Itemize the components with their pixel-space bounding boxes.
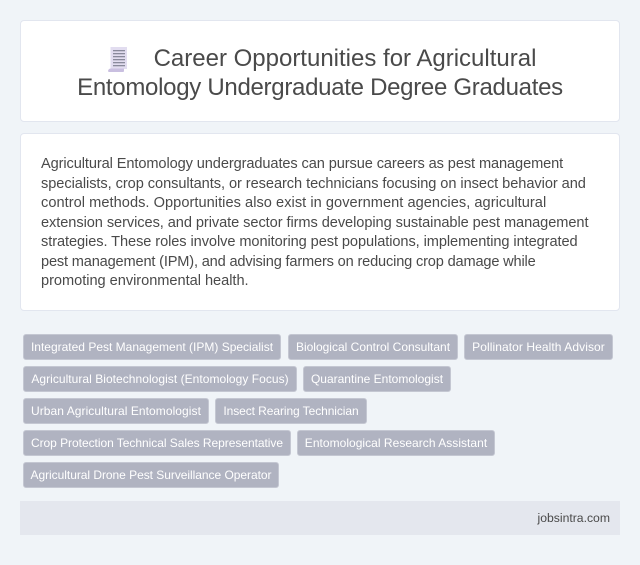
summary text: control methods. Opportunities also exist in government agencies, agricultural: [41, 195, 546, 211]
tag: [215, 398, 367, 424]
career tags: [23, 334, 613, 488]
tag: [297, 430, 495, 456]
summary text: extension services, and private sector firms developing sustainable pest management: [41, 214, 588, 230]
header panel: [20, 20, 620, 122]
tag: Agricultural Biotechnologist (Entomology Focus): [31, 372, 289, 386]
tag: Integrated Pest Management (IPM) Specialist: [31, 340, 273, 354]
tag: Urban Agricultural Entomologist: [31, 404, 201, 418]
tag: [23, 366, 297, 392]
tag: Crop Protection Technical Sales Representative: [31, 436, 283, 450]
tag: [23, 462, 279, 488]
summary text: pest management (IPM), and advising farmers on reducing crop damage while: [41, 254, 536, 270]
footer bar: [20, 501, 620, 535]
title: [77, 45, 563, 101]
summary panel: [20, 133, 620, 311]
summary text: Agricultural Entomology undergraduates can pursue careers as pest management: [41, 156, 563, 172]
tag: Quarantine Entomologist: [311, 372, 443, 386]
tag: Entomological Research Assistant: [305, 436, 487, 450]
tag: [23, 334, 281, 360]
title: Entomology Undergraduate Degree Graduates: [77, 74, 563, 101]
tag: Agricultural Drone Pest Surveillance Operator: [30, 468, 271, 482]
icon: document scroll: [108, 47, 127, 72]
summary text: [41, 156, 588, 289]
tag: [23, 398, 209, 424]
tag: Pollinator Health Advisor: [472, 340, 605, 354]
tag: Biological Control Consultant: [296, 340, 450, 354]
summary text: promoting environmental health.: [41, 273, 249, 289]
tag: [303, 366, 451, 392]
summary text: specialists, crop consultants, or research technicians focusing on insect behavior and: [41, 176, 586, 192]
tag: [23, 430, 291, 456]
title: Career Opportunities for Agricultural: [154, 45, 536, 72]
tag: [464, 334, 613, 360]
footer source text: jobsintra.com: [538, 511, 610, 525]
tag: Insect Rearing Technician: [223, 404, 359, 418]
summary text: strategies. These roles involve monitoring pest populations, implementing integrated: [41, 234, 578, 250]
tag: [288, 334, 458, 360]
